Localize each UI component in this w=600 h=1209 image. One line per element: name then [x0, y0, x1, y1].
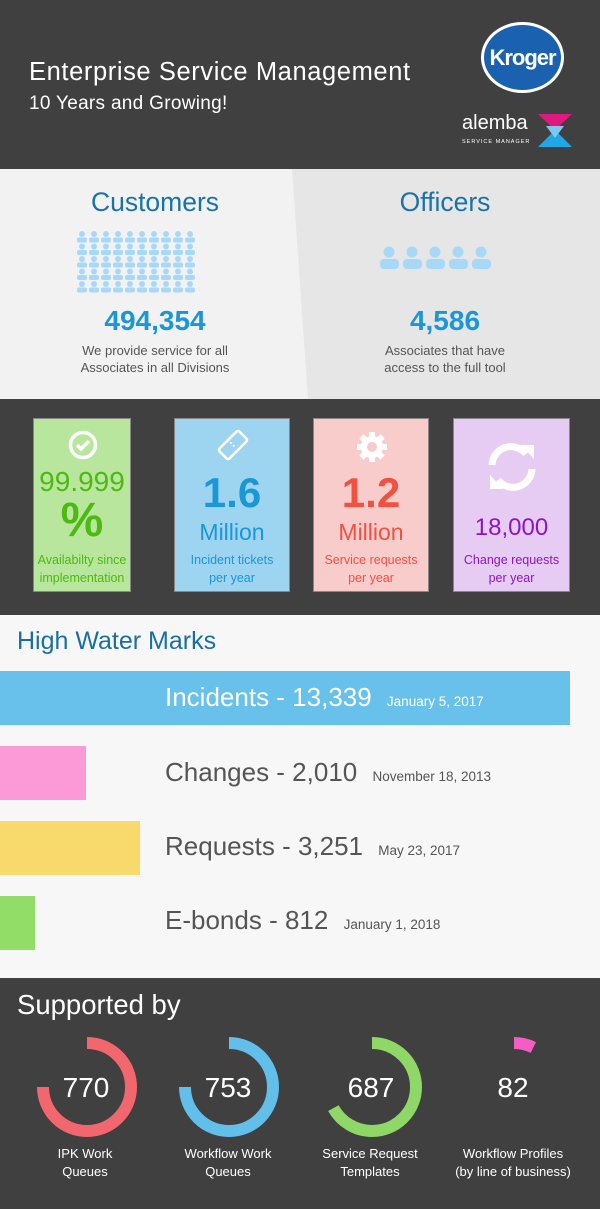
card: service requests	[313, 418, 429, 592]
chart: donut rings: Queues	[62, 1164, 108, 1179]
logo: kroger	[481, 22, 564, 93]
chart: donut rings: 770	[63, 1072, 109, 1103]
card: availability: 99.999	[39, 466, 125, 497]
icon: people row	[380, 246, 491, 269]
chart: donut rings: Service Request	[322, 1146, 418, 1161]
chart: donut rings: Workflow Profiles	[463, 1146, 564, 1161]
card: service requests: 1.2	[342, 469, 400, 516]
card: incidents: 1.6	[203, 469, 261, 516]
heading: high water marks: High Water Marks	[17, 627, 216, 655]
card: incidents: Incident tickets	[191, 553, 273, 567]
logo: alemba: alemba	[462, 112, 528, 134]
number: customers: 494,354	[104, 305, 206, 336]
text: officers: access to the full tool	[384, 360, 506, 375]
text: officers: Associates that have	[385, 343, 505, 358]
chart: donut rings: Workflow Work	[185, 1146, 272, 1161]
chart: donut rings: Templates	[340, 1164, 400, 1179]
card: service requests: Million	[338, 519, 404, 545]
logo: alemba	[462, 112, 572, 147]
text: officers	[384, 343, 506, 375]
bar: e-bonds	[0, 896, 35, 950]
text: customers: We provide service for all	[82, 343, 228, 358]
text: customers: Associates in all Divisions	[81, 360, 229, 375]
card: availability: Availabilty since	[38, 553, 126, 567]
icon: ticket	[218, 430, 248, 460]
header	[0, 0, 600, 169]
bar: changes	[0, 746, 86, 800]
card: incidents	[174, 418, 290, 592]
card: incidents: per year	[209, 571, 255, 585]
card: service requests: per year	[348, 571, 394, 585]
subtitle: 10 Years and Growing!	[29, 93, 228, 114]
card: change requests	[453, 418, 570, 592]
title: Enterprise Service Management	[29, 58, 411, 86]
card: availability: %	[61, 494, 103, 547]
card: change requests: Change requests	[464, 553, 559, 567]
panel: high water marks	[0, 615, 600, 978]
number: officers: 4,586	[410, 305, 480, 336]
bar: requests	[0, 821, 140, 875]
chart: donut rings: IPK Work	[58, 1146, 113, 1161]
panel: customers/officers background	[0, 169, 600, 399]
icon: refresh	[488, 443, 536, 491]
chart: donut rings: 82	[497, 1072, 529, 1103]
chart: donut rings: (by line of business)	[455, 1164, 571, 1179]
icon: gear	[357, 432, 387, 462]
card: availability	[33, 418, 131, 592]
icon: people grid	[77, 231, 195, 292]
text: customers	[80, 343, 229, 375]
chart: donut rings: Queues	[205, 1164, 251, 1179]
chart: donut rings: 687	[348, 1072, 394, 1103]
bar: incidents: Incidents - 13,339 January 5, 2017	[165, 682, 484, 712]
label: changes: Changes - 2,010 November 18, 2013	[165, 757, 491, 787]
heading: customers: Customers	[91, 187, 219, 217]
card: change requests: per year	[489, 571, 534, 585]
panel: supported by	[0, 978, 600, 1209]
logo: kroger: Kroger	[489, 45, 556, 70]
panel: customers	[77, 187, 229, 375]
panel: officers	[380, 187, 506, 375]
card: incidents: Million	[199, 519, 265, 545]
card: change requests: 18,000	[475, 514, 548, 541]
bar: incidents	[0, 671, 570, 725]
chart: donut rings	[37, 1037, 571, 1179]
label: e-bonds: E-bonds - 812 January 1, 2018	[165, 905, 440, 935]
label: requests: Requests - 3,251 May 23, 2017	[165, 831, 460, 861]
heading: supported by: Supported by	[17, 989, 181, 1020]
chart: donut rings: 753	[205, 1072, 251, 1103]
heading: officers: Officers	[400, 187, 490, 217]
logo: alemba: SERVICE MANAGER	[462, 139, 530, 145]
card: availability: implementation	[40, 571, 124, 585]
icon: check circle	[68, 430, 98, 460]
panel: stat cards	[0, 399, 600, 615]
card: service requests: Service requests	[324, 553, 418, 567]
